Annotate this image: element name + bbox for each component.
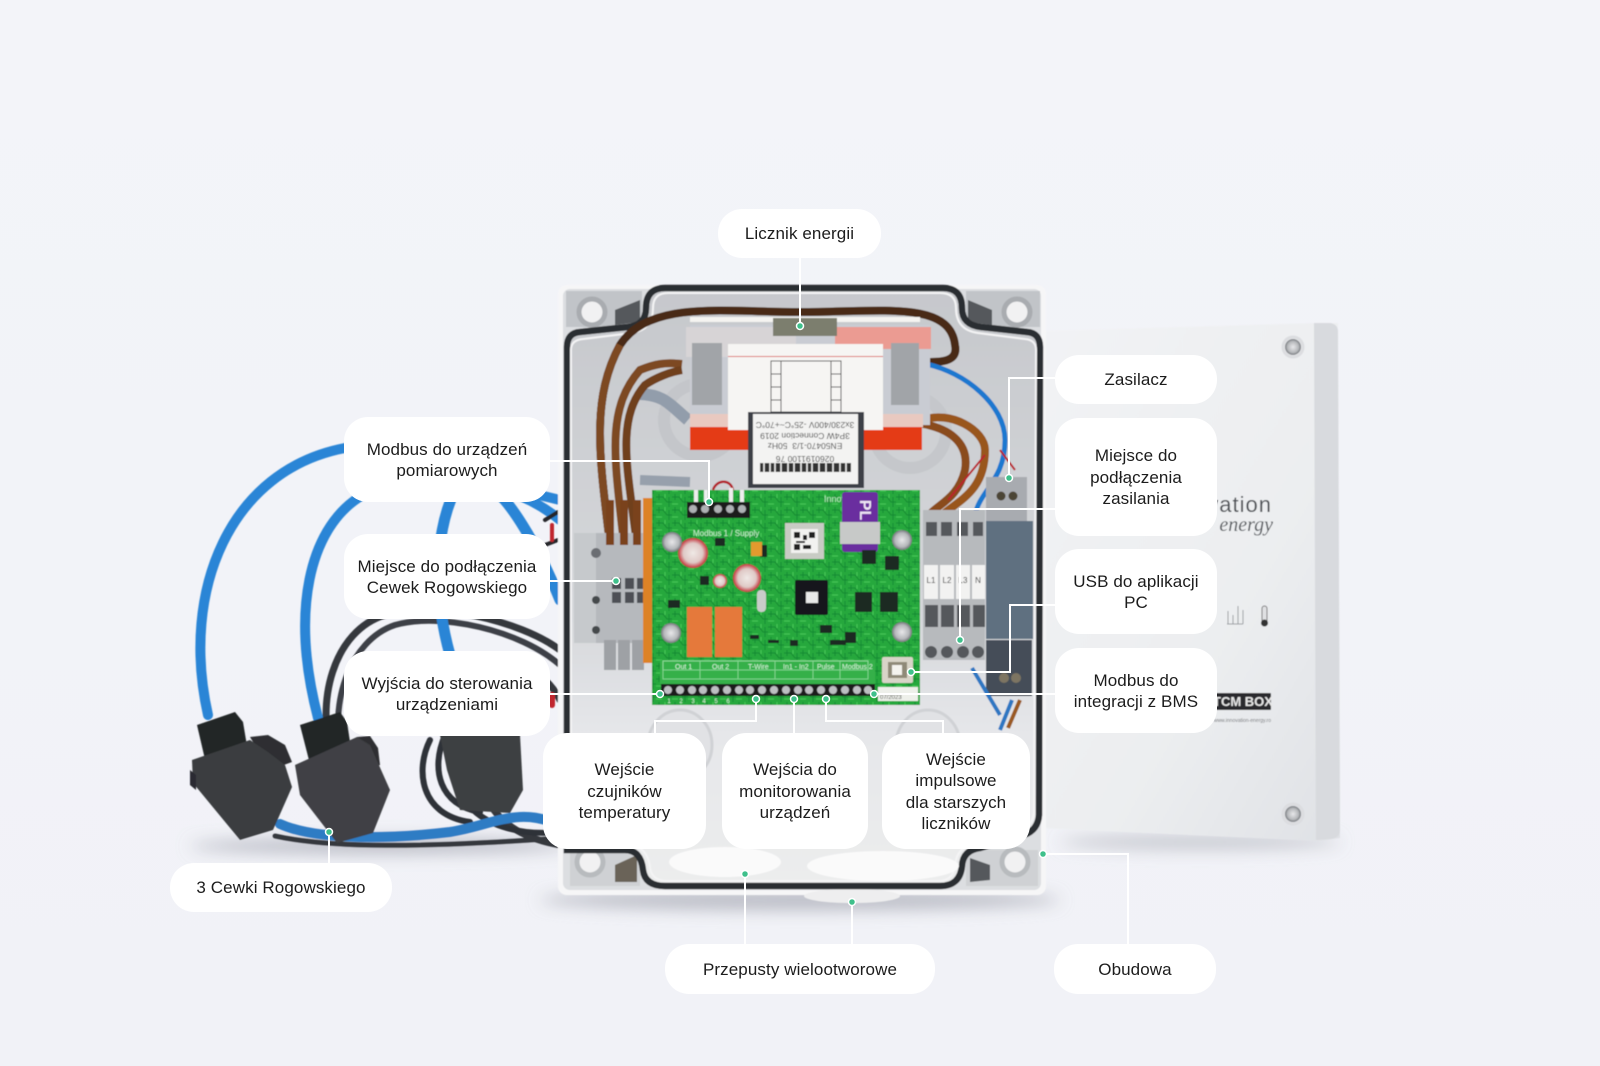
leader: USB: [908, 605, 1055, 676]
relays: [687, 607, 712, 657]
energy meter: [686, 317, 931, 488]
controller PCB: 2: [679, 699, 683, 705]
QR module: [785, 523, 824, 559]
brown wires: [600, 311, 985, 545]
meter data label: [748, 412, 864, 488]
label: Wejście impulsowe dla starszych liczników: [882, 733, 1030, 849]
energy meter: 3P4W Connection 2019: [760, 431, 850, 441]
energy meter: 0260191100 76: [776, 454, 834, 464]
label: Obudowa: [1054, 944, 1216, 994]
leader: Modbus do urządzeń: [550, 461, 712, 506]
label: Modbus do integracji z BMS: [1055, 648, 1217, 733]
label: Wejście czujników temperatury: czujników: [587, 782, 662, 801]
board screws: [661, 530, 912, 643]
label: Wejścia do monitorowania urządzeń: monitorowania: [739, 782, 851, 801]
energy meter: 3x230/400V -25°C~+70°C: [756, 420, 854, 430]
enclosure lid: TCM BOX: [1213, 694, 1273, 709]
label: Wejście czujników temperatury: temperatury: [579, 803, 670, 822]
label: Modbus do urządzeń pomiarowych: Modbus do urządzeń: [367, 440, 527, 458]
leader: Zasilacz: [1006, 378, 1055, 482]
label: Obudowa: Obudowa: [1098, 960, 1172, 979]
energy meter: EN50470-1/3 50Hz: [768, 441, 842, 451]
leader: impulsowe: [822, 696, 943, 733]
controller PCB: In1 - In2: [783, 664, 809, 671]
label: Licznik energii: Licznik energii: [745, 224, 854, 243]
capacitors: [678, 538, 708, 568]
leader: Cewki connection: [550, 578, 620, 584]
photo: product: [190, 285, 1340, 910]
controller PCB: Innovation: [824, 494, 866, 504]
label: Wejście impulsowe dla starszych liczników: impulsowe: [915, 771, 997, 790]
label: Wejście czujników temperatury: [543, 733, 706, 849]
label: Wejście czujników temperatury: Wejście: [595, 760, 654, 779]
Rogowski coils: [190, 448, 560, 845]
controller PCB: 1: [667, 699, 671, 705]
label: Miejsce do podłączenia Cewek Rogowskiego: Cewek Rogowskiego: [367, 578, 527, 597]
label: Modbus do integracji z BMS: Modbus do: [1093, 670, 1178, 690]
label: Wejście impulsowe dla starszych liczników: dla starszych: [906, 792, 1006, 812]
label: Licznik energii: [718, 209, 881, 258]
label: Miejsce do podłączenia zasilania: Miejsce do: [1095, 446, 1177, 465]
USB port: [882, 657, 913, 683]
label: Zasilacz: [1055, 355, 1217, 404]
right terminal block: L2: [943, 576, 952, 585]
leader: podłączenie zasilania: [956, 509, 1055, 644]
lid logo: innovation: [1162, 492, 1272, 517]
enclosure lid: www.innovation-energy.ro: [1214, 718, 1271, 724]
SIM card: [842, 492, 878, 552]
right terminal block: [923, 510, 985, 660]
label: Wejścia do monitorowania urządzeń: Wejścia do: [753, 760, 837, 779]
top terminal: [687, 502, 750, 518]
lid icons: [1227, 606, 1243, 624]
label: Miejsce do podłączenia zasilania: [1055, 418, 1217, 536]
label: Wyjścia do sterowania urządzeniami: Wyjścia do sterowania: [361, 674, 533, 692]
left terminal block: [574, 498, 653, 670]
label: Modbus do urządzeń pomiarowych: [344, 417, 550, 502]
enclosure lid: energy: [1219, 514, 1273, 536]
grey conduit: [640, 394, 688, 420]
controller PCB: 6: [726, 699, 730, 705]
leader: monitorowanie: [790, 696, 798, 733]
right terminal block: L1: [927, 576, 936, 585]
ground shadows: [190, 835, 1340, 910]
leader: Przepusty right: [848, 898, 856, 944]
label: Miejsce do podłączenia Cewek Rogowskiego: Miejsce do podłączenia: [358, 556, 536, 576]
label: Miejsce do podłączenia zasilania: zasilania: [1102, 489, 1170, 508]
controller PCB: 07/2023: [880, 695, 902, 701]
power supply: [972, 477, 1033, 730]
cable glands: [648, 378, 960, 881]
label: USB do aplikacji PC: PC: [1124, 593, 1148, 612]
leader: Obudowa: [1040, 850, 1128, 944]
label: Modbus do urządzeń pomiarowych: pomiarowych: [396, 461, 498, 480]
label: Wejście impulsowe dla starszych liczników: liczników: [922, 814, 990, 833]
controller PCB: Modbus 1 / Supply: [693, 529, 759, 538]
label: 3 Cewki Rogowskiego: [170, 863, 392, 912]
label: Przepusty wielootworowe: Przepusty wielootworowe: [703, 960, 897, 979]
leader: Licznik energii: [796, 258, 804, 330]
controller PCB: Pulse: [817, 664, 835, 671]
label: Wejścia do monitorowania urządzeń: [722, 733, 868, 849]
small components: [668, 538, 899, 646]
leader: Przepusty left: [742, 870, 748, 944]
corner lugs: [566, 291, 1040, 886]
controller PCB: 5: [714, 699, 718, 705]
enclosure lid: [1040, 323, 1340, 841]
controller PCB: Out 2: [712, 664, 729, 671]
distribution box: [558, 285, 1046, 903]
controller PCB: 3: [691, 699, 695, 705]
date sticker: [878, 687, 918, 701]
MCU: [795, 580, 828, 615]
label: Zasilacz: Zasilacz: [1104, 370, 1168, 389]
lid product badge: [1214, 693, 1271, 710]
controller PCB: [652, 482, 920, 705]
leader: Wyjścia: [550, 690, 664, 698]
meter wiring label: [728, 344, 883, 430]
box body: [558, 285, 1046, 895]
leader: czujniki temperatury: [655, 696, 760, 733]
label: Przepusty wielootworowe: [665, 944, 935, 994]
label: USB do aplikacji PC: [1055, 549, 1217, 634]
bottom terminal: [661, 684, 875, 696]
controller PCB: PL: [856, 500, 873, 520]
right terminal block: L3: [959, 576, 968, 585]
controller PCB: 4: [702, 699, 706, 705]
label: Modbus do integracji z BMS: integracji z BMS: [1074, 692, 1198, 711]
label: Miejsce do podłączenia zasilania: podłączenia: [1090, 468, 1182, 487]
label: Wejścia do monitorowania urządzeń: urządzeń: [760, 803, 830, 822]
label: Wyjścia do sterowania urządzeniami: [344, 651, 550, 736]
label: Wejście impulsowe dla starszych liczników: Wejście: [926, 750, 986, 768]
controller PCB: Modbus 2: [842, 664, 873, 671]
leader: Modbus BMS: [870, 690, 1055, 698]
leader: 3 Cewki: [326, 828, 332, 863]
controller PCB: T-Wire: [748, 664, 769, 671]
label: 3 Cewki Rogowskiego: 3 Cewki Rogowskiego: [196, 878, 366, 897]
tray and gasket: [567, 288, 1040, 886]
label: Miejsce do podłączenia Cewek Rogowskiego: [344, 534, 550, 619]
label: USB do aplikacji PC: USB do aplikacji: [1073, 572, 1199, 590]
controller PCB: Out 1: [675, 664, 692, 671]
right terminal block: N: [975, 576, 981, 585]
label: Wyjścia do sterowania urządzeniami: urządzeniami: [396, 695, 498, 714]
